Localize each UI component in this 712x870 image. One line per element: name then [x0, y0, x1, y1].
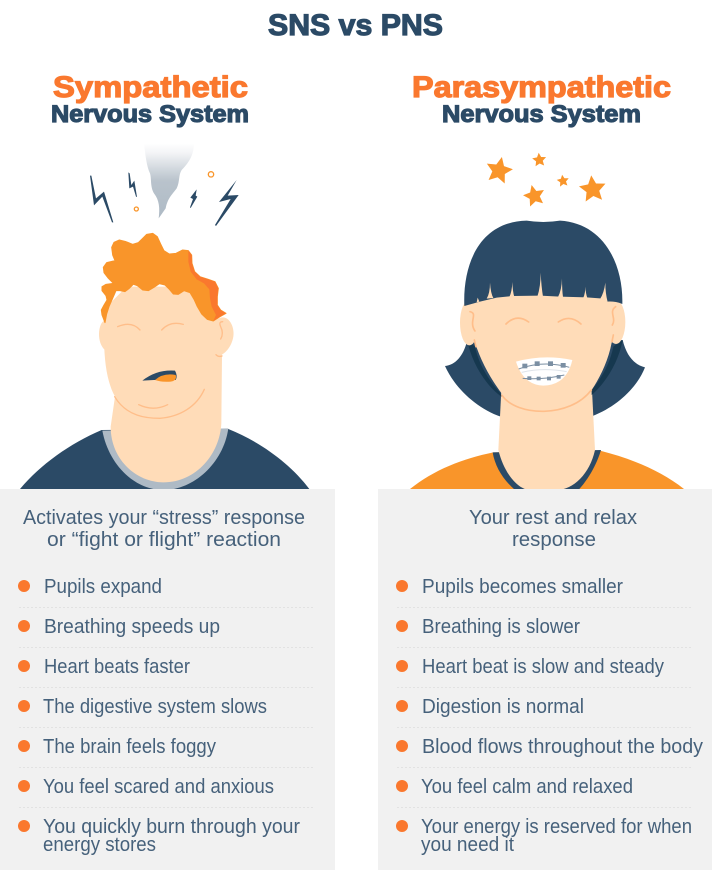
face — [467, 290, 621, 410]
heading: parasympathetic: Nervous System — [442, 101, 641, 128]
bullet list: energy stores — [43, 834, 156, 856]
bullet list: Pupils becomes smaller — [422, 576, 623, 598]
shirt collar — [493, 450, 601, 490]
illustration: stressed man — [20, 143, 309, 490]
shirt — [410, 451, 684, 489]
panel heading: Your rest and relax — [469, 507, 637, 529]
bullet list: You feel scared and anxious — [43, 776, 274, 798]
facial lines — [115, 322, 223, 418]
bullet list: Breathing speeds up — [44, 616, 220, 638]
neck shadow — [467, 340, 623, 397]
hair — [464, 221, 622, 306]
shirt — [20, 429, 309, 489]
icon: small circles — [134, 172, 214, 211]
icon: lightning bolts — [90, 172, 239, 226]
icon: stars — [484, 152, 607, 208]
bullet list: Your energy is reserved for when — [421, 816, 692, 838]
panel: sympathetic — [0, 489, 335, 870]
title: SNS vs PNS — [268, 9, 443, 42]
heading: sympathetic: Nervous System — [51, 101, 249, 128]
heading: parasympathetic — [412, 71, 671, 128]
icon: tornado — [144, 143, 194, 218]
bullet list: You feel calm and relaxed — [421, 776, 633, 798]
ears — [460, 300, 625, 345]
panel heading: or “fight or flight” reaction — [47, 529, 281, 551]
facial lines — [470, 307, 616, 411]
panel heading: Activates your “stress” response — [23, 507, 305, 529]
panel heading — [23, 507, 305, 551]
illustration: relaxed woman — [410, 152, 684, 490]
bullet list: The brain feels foggy — [43, 736, 216, 758]
heading: sympathetic — [51, 71, 249, 128]
bullet list: Pupils expand — [44, 576, 162, 598]
bullet list: you need it — [421, 834, 514, 856]
back hair — [445, 340, 645, 417]
bullet list: The digestive system slows — [43, 696, 267, 718]
panel: parasympathetic — [378, 489, 712, 870]
bullet list: Blood flows throughout the body — [422, 736, 703, 758]
hair shadow — [188, 251, 226, 321]
bullet list: Digestion is normal — [422, 696, 584, 718]
head and neck — [104, 287, 222, 482]
bullet list — [396, 576, 703, 856]
hair — [101, 233, 226, 323]
bullet list: You quickly burn through your — [43, 816, 300, 838]
mouth with braces — [516, 357, 572, 386]
heading: parasympathetic: Parasympathetic — [412, 71, 671, 104]
ears — [99, 317, 234, 357]
heading: sympathetic: Sympathetic — [53, 71, 248, 104]
fringe gaps — [477, 273, 608, 302]
panel heading — [469, 507, 637, 551]
bullet list: Heart beat is slow and steady — [422, 656, 664, 678]
panel heading: response — [512, 529, 596, 551]
bullet list: Breathing is slower — [422, 616, 580, 638]
bullet list: Heart beats faster — [44, 656, 190, 678]
neck — [498, 383, 595, 490]
shirt collar — [102, 428, 228, 490]
mouth — [142, 371, 177, 382]
bullet list — [18, 576, 300, 856]
